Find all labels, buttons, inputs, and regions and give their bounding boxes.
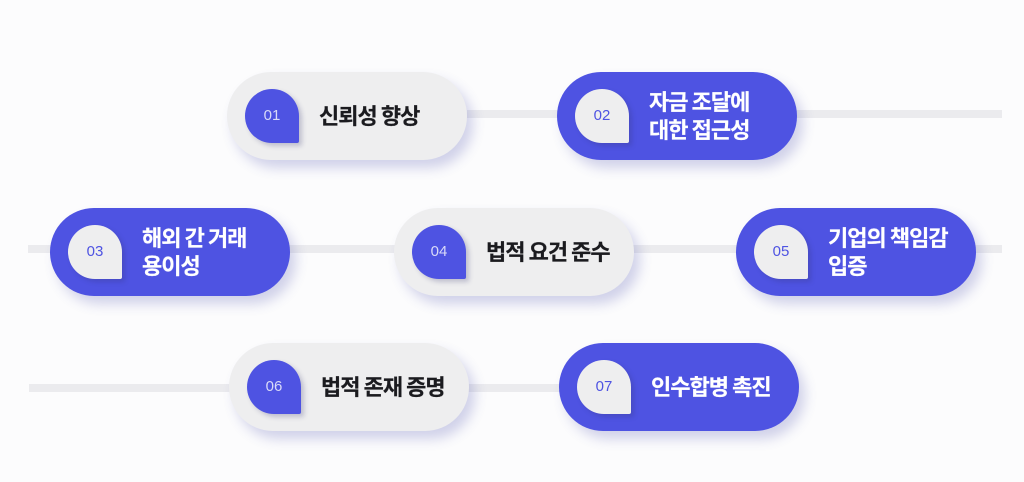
badge 02: 02 [594,107,610,124]
badge 05: 05 [773,243,789,260]
label 07: 인수합병 촉진 [651,375,771,400]
pill 07: 인수합병 촉진 [559,343,799,431]
label 02: 대한 접근성 [649,118,749,143]
badge 04 [412,225,466,279]
label 02 [649,90,749,143]
connector line: row 1 [467,110,1002,118]
label 05: 기업의 책임감 [828,226,948,251]
pill 03: 해외 간 거래 용이성 [50,208,290,296]
pill 02: 자금 조달에 대한 접근성 [557,72,797,160]
label 06: 법적 존재 증명 [321,375,445,400]
badge 07 [577,360,631,414]
pill 05: 기업의 책임감 입증 [736,208,976,296]
badge 01: 01 [264,107,280,124]
badge 07: 07 [596,378,612,395]
connector line: row 2 [28,245,1002,253]
label 05 [828,226,948,279]
connector line: row 3 [29,384,560,392]
label 05: 입증 [828,254,866,279]
label 03: 용이성 [142,254,200,279]
pill 04: 법적 요건 준수 [394,208,634,296]
badge 01 [245,89,299,143]
badge 06: 06 [266,378,282,395]
badge 05 [754,225,808,279]
badge 02 [575,89,629,143]
badge 04: 04 [431,243,447,260]
pill 01: 신뢰성 향상 [227,72,467,160]
pill 06: 법적 존재 증명 [229,343,469,431]
label 03: 해외 간 거래 [142,226,246,251]
label 03 [142,226,246,279]
badge 03 [68,225,122,279]
badge 06 [247,360,301,414]
badge 03: 03 [87,243,103,260]
label 02: 자금 조달에 [649,90,749,115]
label 04: 법적 요건 준수 [486,240,610,265]
label 01: 신뢰성 향상 [319,104,419,129]
